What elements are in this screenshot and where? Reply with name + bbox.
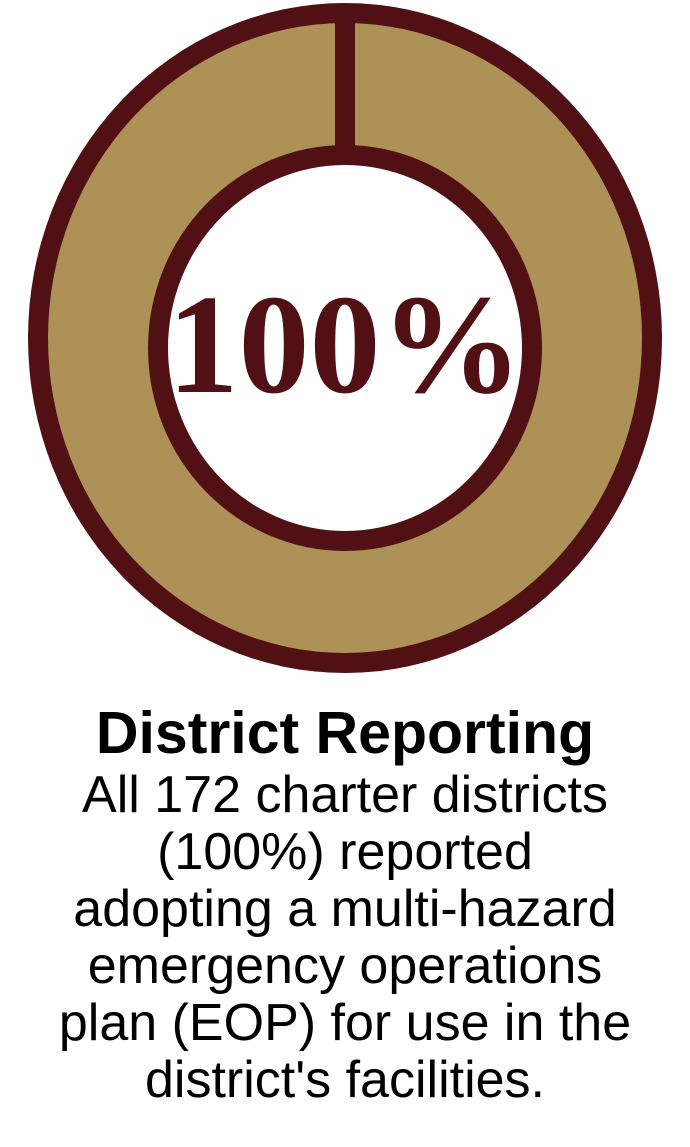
chart: donut 100%	[28, 3, 662, 673]
description text	[59, 766, 631, 1109]
heading: District Reporting	[96, 700, 594, 766]
description text: All 172 charter districts	[82, 766, 608, 824]
description text: (100%) reported	[157, 823, 533, 881]
description text: plan (EOP) for use in the	[59, 994, 631, 1052]
description text: adopting a multi-hazard	[73, 880, 617, 938]
description text: district's facilities.	[145, 1051, 545, 1109]
description text: emergency operations	[88, 937, 602, 995]
value label: 100%	[168, 265, 522, 423]
